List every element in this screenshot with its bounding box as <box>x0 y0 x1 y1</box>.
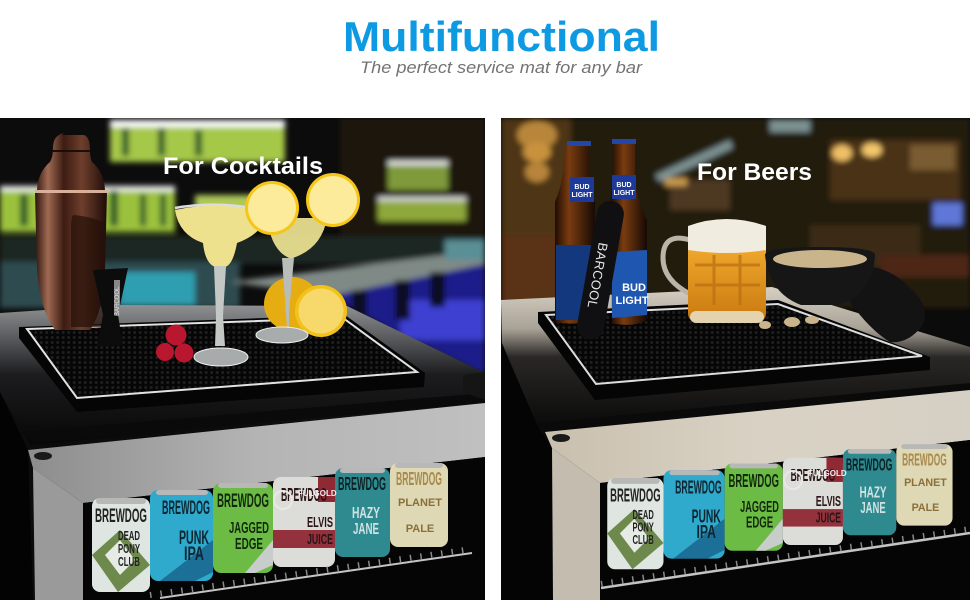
can: jagged edge: EDGE <box>746 515 773 532</box>
can: elvis juice: ELVIS <box>816 494 841 510</box>
icon: bottle opener <box>575 199 626 341</box>
can: dead pony club: BREWDOG <box>610 484 661 505</box>
can: punk ipa <box>664 470 725 559</box>
black cabinet side <box>0 392 33 600</box>
can: elvis juice: BREWDOG <box>791 465 835 485</box>
icon: bottle opener: BARCOOL <box>585 241 611 309</box>
icon: beer mug <box>663 219 766 323</box>
subtitle: The perfect service mat for any bar <box>360 59 644 77</box>
panel label: for beers: For Beers <box>697 159 812 186</box>
can: jagged edge: JAGGED <box>740 499 779 516</box>
can: jagged edge: EDGE <box>235 536 263 553</box>
can: elvis juice: JUICE <box>816 511 841 527</box>
icon: jigger: BARCOOL <box>115 286 121 316</box>
beer cans <box>92 463 448 592</box>
door screw <box>552 434 570 442</box>
can: dead pony club <box>607 478 664 569</box>
can: hazy jane: JANE <box>860 500 886 517</box>
can: hazy jane <box>843 449 896 535</box>
can: hazy jane: BREWDOG <box>338 474 386 494</box>
right edge handle <box>463 372 485 400</box>
steel frame top strip <box>545 390 970 483</box>
can: elvis juice: ELVIS <box>307 514 333 531</box>
can: punk ipa: BREWDOG <box>162 498 210 519</box>
blurred pub background <box>501 118 970 310</box>
icon: beer bottle left: LIGHT <box>572 192 593 199</box>
icon: beer bottle left <box>555 141 596 324</box>
steel frame top strip <box>28 403 485 503</box>
door window <box>84 457 485 503</box>
can: jagged edge: JAGGED <box>229 520 269 537</box>
can: planet pale: PLANET <box>904 477 947 489</box>
can: planet pale: PALE <box>406 523 434 535</box>
can: punk ipa <box>150 490 213 581</box>
can: hazy jane: HAZY <box>859 484 887 501</box>
icon: jigger <box>93 268 128 347</box>
icon: back cocktail glass <box>256 218 327 343</box>
can: punk ipa: PUNK <box>179 528 209 549</box>
can: dead pony club: BREWDOG <box>95 506 147 527</box>
brand mark: ful gold: FULGOLD <box>298 489 337 498</box>
steel frame left strip <box>552 448 600 600</box>
fridge top <box>501 287 970 408</box>
can: punk ipa: PUNK <box>692 506 721 527</box>
wire shelf <box>601 529 970 588</box>
brand mark: ful gold: FULGOLD <box>808 469 847 478</box>
icon: pistachios on mat <box>759 316 819 329</box>
blurred bar background <box>0 118 485 375</box>
icon: beer bottle right: LIGHT <box>614 190 635 197</box>
beer cans <box>607 444 953 569</box>
icon: black cloth <box>850 267 925 342</box>
front glass edge <box>683 383 970 410</box>
icon: cocktail shaker <box>35 133 107 330</box>
icon: beer bottle left: BUD <box>574 184 590 191</box>
can: jagged edge <box>213 483 273 573</box>
can: planet pale <box>390 463 448 547</box>
black cabinet side <box>501 343 553 600</box>
can: elvis juice <box>273 477 335 567</box>
can: dead pony club: DEAD <box>118 528 140 543</box>
panel: for cocktails <box>0 118 485 600</box>
can: hazy jane: JANE <box>353 521 379 538</box>
can: punk ipa: IPA <box>696 521 716 542</box>
icon: raspberries <box>156 324 194 362</box>
door window <box>600 440 970 483</box>
can: dead pony club: PONY <box>118 541 140 556</box>
can: planet pale: BREWDOG <box>396 469 442 489</box>
can: elvis juice <box>783 458 843 545</box>
icon: beer bottle right: BUD <box>616 182 632 189</box>
can: jagged edge: BREWDOG <box>217 491 269 512</box>
steel frame left strip <box>33 468 83 600</box>
icon: beer bottle right <box>611 139 649 325</box>
wire shelf <box>150 549 472 598</box>
can: hazy jane <box>335 468 390 557</box>
brand mark: ful gold <box>784 469 847 489</box>
can: punk ipa: BREWDOG <box>675 477 722 498</box>
can: punk ipa: IPA <box>184 544 204 565</box>
panel: for beers <box>501 118 970 600</box>
can: planet pale <box>896 444 953 526</box>
fridge top <box>0 305 484 406</box>
brand mark: ful gold <box>274 489 337 509</box>
bar mat <box>538 300 930 400</box>
door screw <box>34 452 52 460</box>
icon: beer bottle right: LIGHT <box>616 295 649 307</box>
can: dead pony club <box>92 498 150 592</box>
icon: lemon <box>264 277 347 337</box>
can: elvis juice: JUICE <box>307 531 333 548</box>
can: dead pony club: CLUB <box>632 533 654 547</box>
can: jagged edge: BREWDOG <box>728 470 779 491</box>
can: elvis juice: BREWDOG <box>281 485 327 505</box>
title: Multifunctional <box>343 13 660 60</box>
panel label: for cocktails: For Cocktails <box>163 153 323 180</box>
icon: pistachio bowl <box>765 247 875 305</box>
icon: front cocktail glass <box>175 205 267 366</box>
icon: lemon slices <box>245 173 360 235</box>
can: dead pony club: PONY <box>632 520 654 534</box>
can: jagged edge <box>725 464 783 551</box>
can: dead pony club: DEAD <box>632 508 654 522</box>
can: dead pony club: CLUB <box>118 554 140 569</box>
can: planet pale: PLANET <box>398 497 442 509</box>
icon: beer bottle right: BUD <box>622 282 646 294</box>
can: hazy jane: HAZY <box>352 505 380 522</box>
can: planet pale: PALE <box>912 502 939 514</box>
can: hazy jane: BREWDOG <box>846 454 892 474</box>
bar mat <box>19 315 425 412</box>
front glass edge <box>246 394 485 414</box>
